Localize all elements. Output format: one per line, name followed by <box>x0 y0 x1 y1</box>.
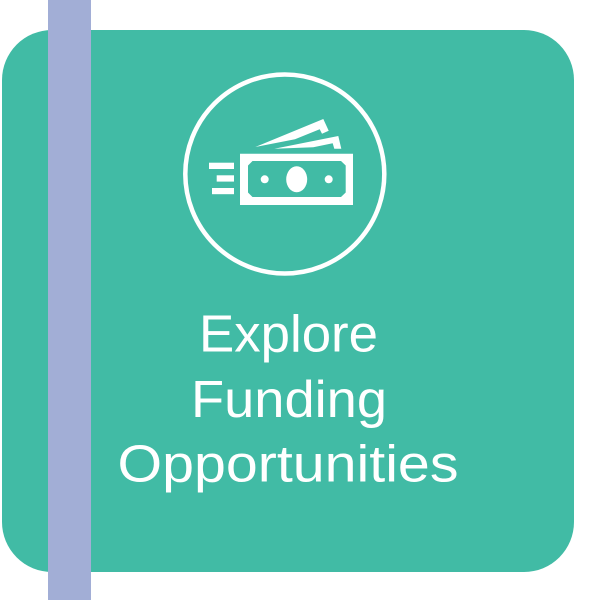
icon: banknote centre oval <box>286 166 307 192</box>
heading: explore funding opportunities: Opportunities <box>118 436 458 494</box>
heading: explore funding opportunities: Explore <box>199 306 378 364</box>
icon: money in a circle <box>185 74 384 274</box>
heading: explore funding opportunities: Funding <box>191 371 387 429</box>
vertical lavender bar <box>48 0 91 600</box>
icon: banknote left dot <box>261 175 269 183</box>
icon: motion lines <box>209 163 234 194</box>
icon: front banknote <box>240 154 353 205</box>
heading: explore funding opportunities <box>118 306 458 494</box>
icon: banknote right dot <box>325 175 333 183</box>
icon: back banknotes <box>255 119 341 149</box>
icon ring <box>185 74 384 274</box>
